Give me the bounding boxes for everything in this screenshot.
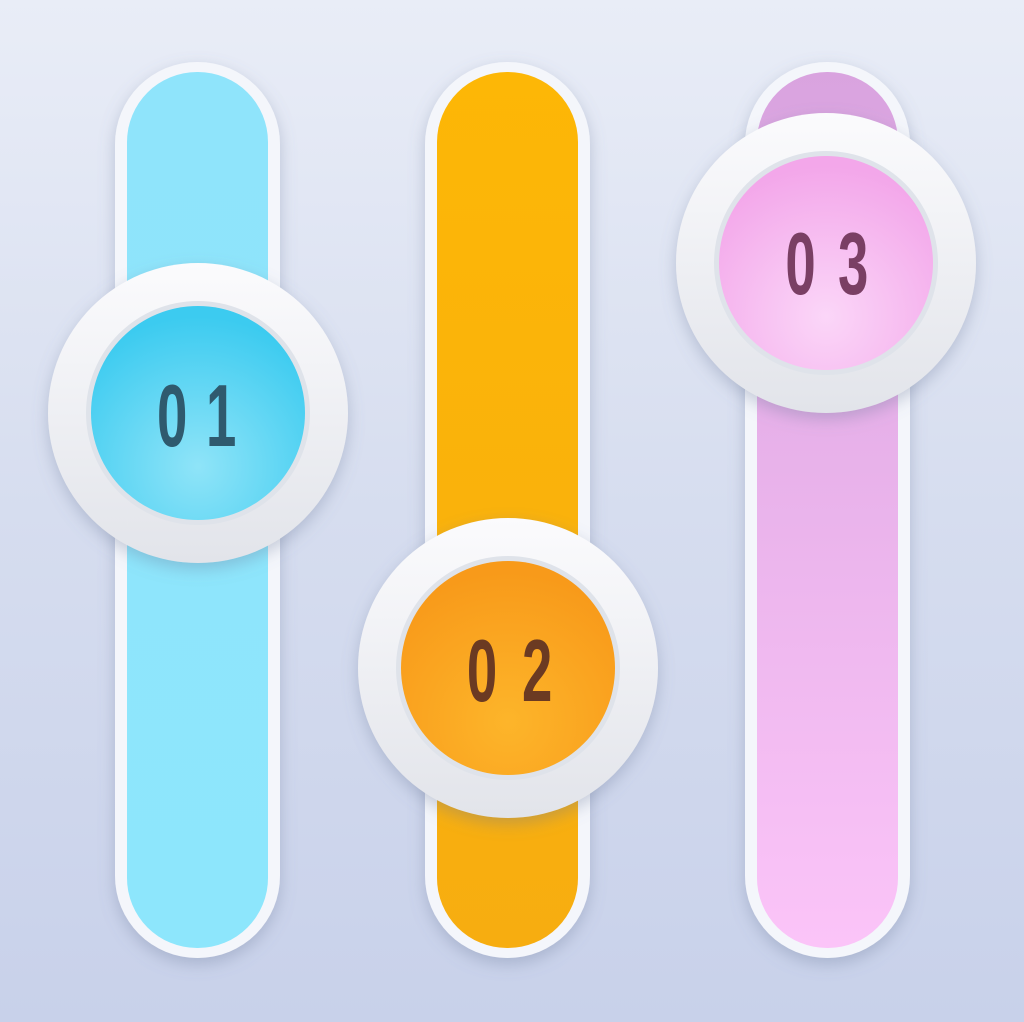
label 01: 01 <box>157 367 255 465</box>
slider 1: blue track <box>115 62 280 958</box>
knob 02 <box>358 518 658 818</box>
knob 03 <box>676 113 976 413</box>
knob 01 <box>48 263 348 563</box>
label 03: 03 <box>785 215 891 313</box>
label 02: 02 <box>467 622 577 720</box>
slider 3: purple track <box>745 62 910 958</box>
slider 2: orange track <box>425 62 590 958</box>
